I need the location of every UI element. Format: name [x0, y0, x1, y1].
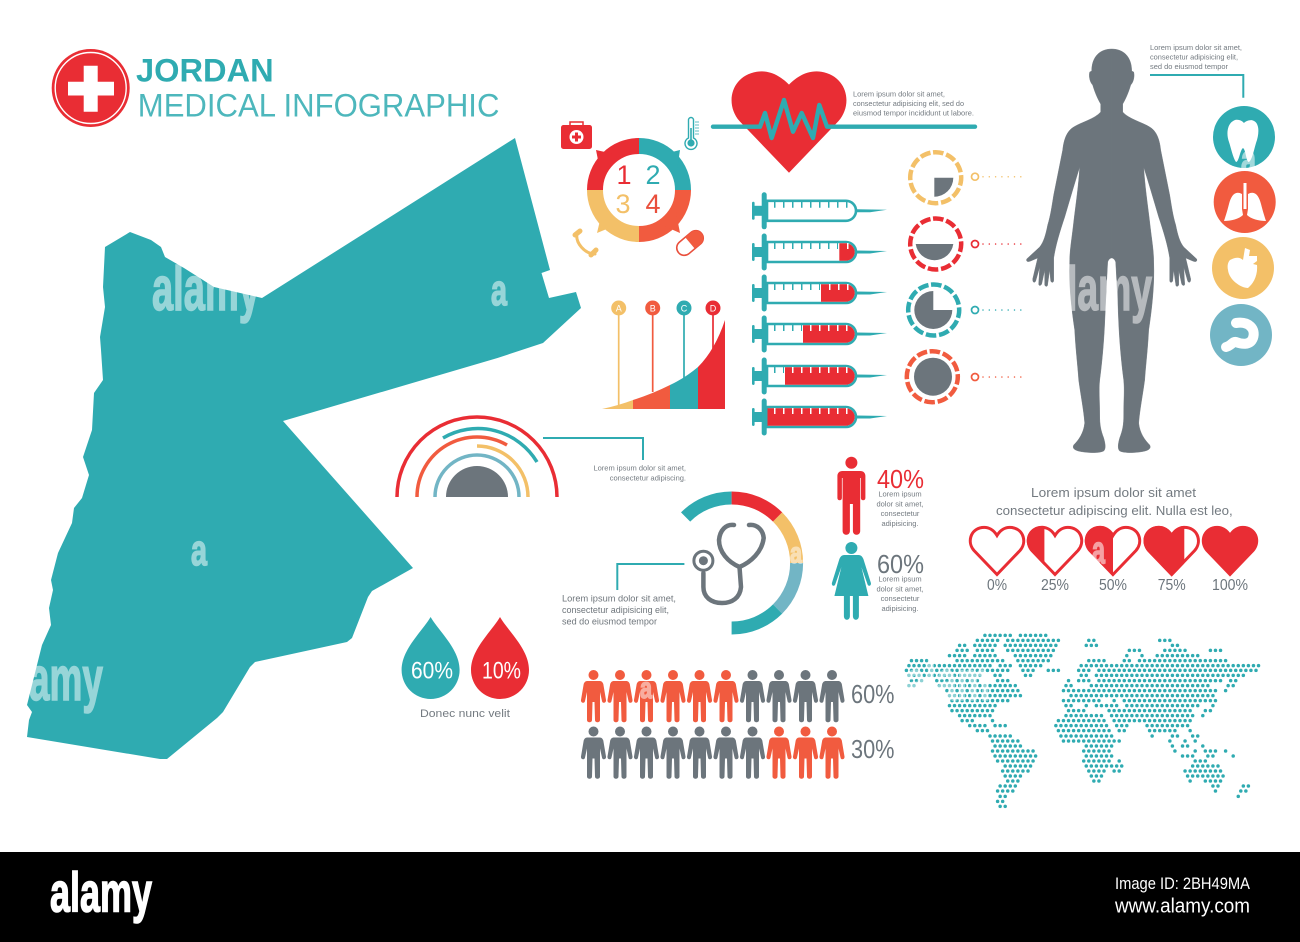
gauge: yellow 25%	[908, 150, 1027, 206]
numbered ring diagram: 2	[645, 160, 661, 190]
people row: 60%	[581, 670, 894, 722]
watermark on map: alamy	[152, 255, 260, 324]
people row: 60%: 60%	[851, 679, 894, 709]
stethoscope ring: a	[790, 537, 802, 570]
gauge: orange 100%	[904, 349, 1027, 405]
statistic: 40%	[876, 464, 924, 528]
heart: 50%: 50%	[1099, 577, 1127, 594]
syringe: level 4	[752, 358, 887, 394]
syringe: level 2	[752, 274, 887, 312]
icon: stomach	[1210, 304, 1272, 366]
text: organs caption: sed do eiusmod tempor	[1150, 62, 1228, 71]
statistic: 60%: Lorem ipsum	[878, 574, 922, 584]
heart: 25%: 25%	[1041, 577, 1069, 594]
area chart with A B C D markers: C	[681, 303, 688, 313]
text: heart caption: consectetur adipisicing elit, sed do	[853, 99, 964, 108]
area chart with A B C D markers: A	[616, 303, 622, 313]
heart: 0%: 0%	[987, 577, 1007, 594]
icon: thermometer	[685, 118, 699, 149]
heart: 75%	[1145, 527, 1198, 594]
text: arcs caption	[593, 464, 686, 482]
drop: 60%: 60%	[411, 658, 453, 684]
text: organs caption	[1150, 43, 1242, 71]
hearts percentage scale	[970, 527, 1257, 594]
people row: 30%: 30%	[851, 734, 894, 764]
text: heart caption: Lorem ipsum dolor sit amet,	[853, 90, 945, 98]
statistic: 60%: consectetur	[881, 594, 920, 603]
text: organs caption: consectetur adipisicing elit,	[1150, 52, 1238, 62]
text: hearts heading: Lorem ipsum dolor sit amet	[1031, 485, 1196, 500]
statistic: 40%: adipisicing.	[881, 519, 919, 528]
statistic: 40%: Lorem ipsum	[878, 490, 922, 498]
heart: 100%	[1203, 527, 1257, 594]
text: stethoscope caption: consectetur adipisicing elit,	[562, 605, 669, 615]
watermark on body: lamy	[1067, 255, 1152, 324]
numbered ring diagram: 1	[616, 160, 632, 190]
numbered ring diagram	[595, 146, 683, 234]
stethoscope ring	[686, 498, 802, 628]
numbered ring diagram: 4	[645, 189, 661, 219]
area chart with A B C D markers: D	[710, 303, 717, 313]
statistic: 60%	[876, 549, 924, 613]
human body silhouette	[1027, 49, 1197, 453]
gauge: red 50%	[908, 216, 1027, 272]
icon: anatomical heart	[1212, 237, 1274, 299]
text: stethoscope caption	[562, 594, 676, 626]
icon: pill	[674, 228, 706, 258]
heart: 0%	[970, 527, 1024, 594]
heart: 50%: a	[1092, 530, 1106, 572]
map: Jordan	[27, 138, 581, 759]
people row: 60%: a	[640, 672, 652, 705]
connector to organs	[1150, 75, 1243, 98]
statistic: 40%: consectetur	[881, 509, 920, 518]
heart with ECG line	[713, 71, 975, 173]
footer logo: alamy	[50, 861, 152, 924]
icon: tooth: a	[1241, 138, 1257, 182]
icon: stethoscope	[694, 525, 764, 603]
icon: medical kit	[561, 122, 592, 149]
people row: 30%	[581, 726, 894, 779]
statistic: 40%: dolor sit amet,	[876, 500, 924, 508]
title	[136, 53, 499, 124]
blood drops	[402, 617, 529, 720]
title: MEDICAL INFOGRAPHIC	[138, 88, 499, 124]
text: arcs caption: consectetur adipiscing.	[610, 474, 686, 482]
text: hearts heading: consectetur adipiscing elit. Nulla est leo,	[996, 503, 1233, 518]
footer bar	[0, 852, 1300, 942]
text: stethoscope caption: Lorem ipsum dolor sit amet,	[562, 594, 676, 604]
watermark on map: a	[491, 266, 507, 315]
statistic: 40%: 40%	[877, 464, 924, 494]
arcs diagram	[397, 417, 557, 497]
statistic: 60%: dolor sit amet,	[876, 584, 924, 594]
text: heart caption	[853, 90, 974, 118]
heart: 100%: 100%	[1212, 577, 1248, 594]
heart: 25%	[1028, 527, 1082, 594]
icon: lungs	[1214, 171, 1276, 233]
title: JORDAN	[136, 53, 274, 89]
text: heart caption: eiusmod tempor incididunt ut labore.	[853, 108, 974, 118]
text: organs caption: Lorem ipsum dolor sit amet,	[1150, 43, 1242, 52]
syringe: level 1	[752, 234, 887, 270]
connector from stethoscope	[617, 564, 684, 590]
text: stethoscope caption: sed do eiusmod tempor	[562, 616, 657, 626]
gauge: teal 75%	[906, 282, 1027, 338]
syringe: empty	[752, 192, 887, 229]
icon: telephone	[575, 231, 596, 255]
syringe: level 3	[752, 316, 887, 352]
dotted world map	[906, 635, 1259, 806]
watermark on world map: alam	[905, 649, 990, 712]
drop: 10%: 10%	[482, 658, 521, 684]
icon: tooth	[1213, 106, 1275, 182]
connector from arcs	[543, 438, 643, 460]
numbered ring diagram: 3	[615, 189, 631, 219]
watermark on map	[29, 255, 507, 714]
text: arcs caption: Lorem ipsum dolor sit amet,	[593, 464, 686, 472]
heart: 75%: 75%	[1158, 577, 1186, 594]
statistic: 60%: 60%	[877, 549, 924, 579]
text: hearts heading	[996, 485, 1233, 518]
icon: woman	[832, 542, 871, 620]
footer url: www.alamy.com	[1114, 896, 1250, 918]
watermark on map: amy	[29, 645, 103, 714]
logo: red medical cross badge	[52, 49, 130, 127]
watermark on map: a	[191, 526, 207, 575]
area chart with A B C D markers: B	[650, 303, 656, 313]
syringe levels	[752, 192, 887, 436]
statistic: 60%: adipisicing.	[881, 604, 919, 613]
icon: man	[837, 457, 865, 535]
area chart with A B C D markers	[602, 300, 725, 409]
caption: drops: Donec nunc velit	[420, 708, 510, 720]
syringe: full	[752, 398, 887, 436]
heart: 50%	[1086, 527, 1140, 594]
footer image id: Image ID: 2BH49MA	[1115, 874, 1251, 893]
